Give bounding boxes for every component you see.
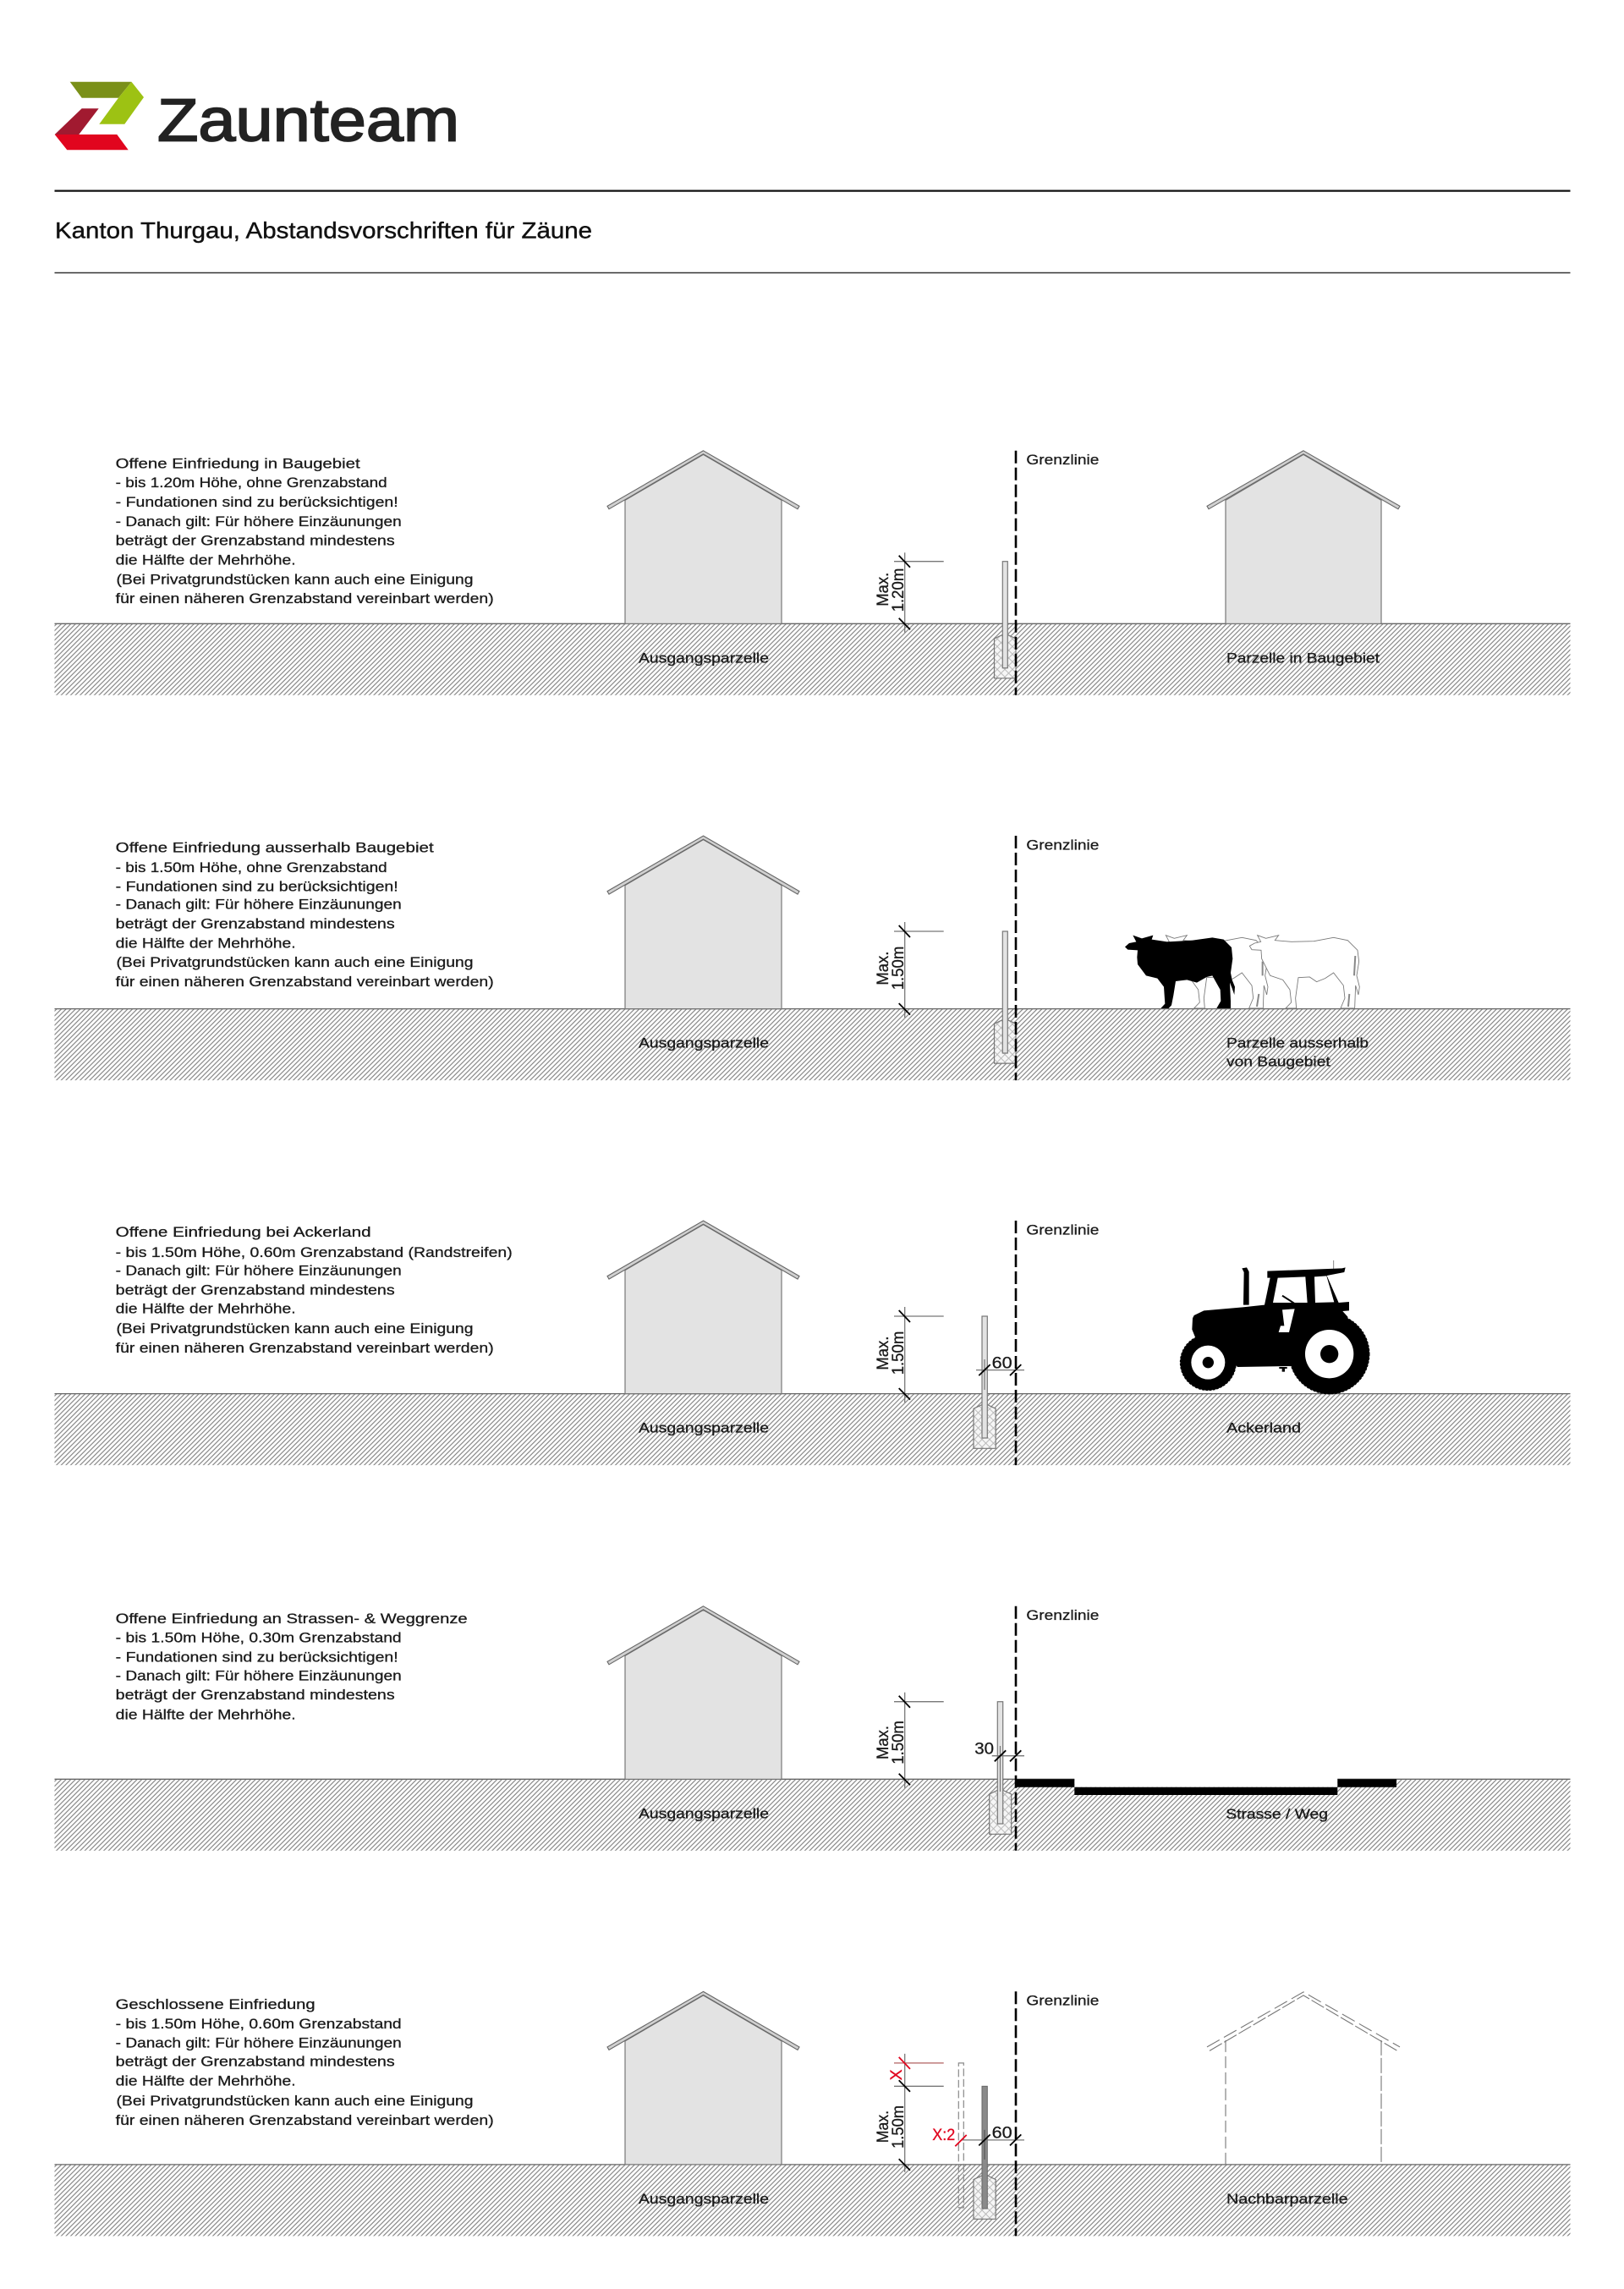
text block: rules <box>116 840 494 990</box>
text block: rules: - bis 1.50m Höhe, 0.60m Grenzabstand (Randstreifen) <box>116 1244 513 1260</box>
text block: rules: die Hälfte der Mehrhöhe. <box>116 935 296 951</box>
height dimension <box>875 1693 944 1788</box>
label: Strasse / Weg: Strasse / Weg <box>1226 1806 1328 1822</box>
label: Ausgangsparzelle: Ausgangsparzelle <box>639 1805 769 1821</box>
panel: Offene Einfriedung bei Ackerland <box>54 1221 1570 1465</box>
panel: Geschlossene Einfriedung <box>54 1991 1570 2236</box>
text block: rules: - Danach gilt: Für höhere Einzäunungen <box>116 897 402 913</box>
label: Grenzlinie: Grenzlinie <box>1026 1993 1099 2009</box>
icon: cows <box>1125 936 1359 1008</box>
header rule <box>54 190 1570 192</box>
ground hatch <box>54 2165 1570 2236</box>
height dimension with red X offset: X <box>888 2069 906 2080</box>
logo <box>55 82 459 155</box>
fence post and foundation <box>995 562 1016 678</box>
distance dimension: 30: 30 <box>974 1740 994 1758</box>
house: neighbour <box>1207 451 1400 623</box>
text block: rules: beträgt der Grenzabstand mindestens <box>116 915 395 931</box>
text block: rules: (Bei Privatgrundstücken kann auch eine Einigung <box>117 1320 474 1337</box>
title: Kanton Thurgau, Abstandsvorschriften für Zäune <box>55 218 592 244</box>
distance dimension: 60: 60 <box>992 1354 1012 1372</box>
panel: Offene Einfriedung ausserhalb Baugebiet <box>54 836 1570 1080</box>
boundary line <box>1015 1991 1017 2236</box>
text block: rules <box>116 1224 513 1356</box>
text block: rules: für einen näheren Grenzabstand vereinbart werden) <box>116 1340 494 1356</box>
text block: rules <box>116 1996 494 2128</box>
text block: rules: beträgt der Grenzabstand mindestens <box>116 533 395 549</box>
text block: rules: - Fundationen sind zu berücksichtigen! <box>116 1650 398 1666</box>
distance dimension: 30 <box>974 1740 1024 1761</box>
height dimension <box>875 1307 944 1402</box>
text block: rules: beträgt der Grenzabstand mindestens <box>116 1282 395 1298</box>
text block: rules: (Bei Privatgrundstücken kann auch eine Einigung <box>117 2093 474 2109</box>
height dimension: Max. <box>875 1726 892 1759</box>
label: Grenzlinie: Grenzlinie <box>1026 837 1099 853</box>
panel: Offene Einfriedung an Strassen- & Weggrenze <box>54 1606 1570 1851</box>
text block: rules: Offene Einfriedung bei Ackerland <box>116 1224 371 1240</box>
label: Ausgangsparzelle: Ausgangsparzelle <box>639 1420 769 1436</box>
fence post and foundation <box>995 931 1016 1063</box>
boundary line <box>1015 1221 1017 1465</box>
label: Grenzlinie: Grenzlinie <box>1026 1221 1099 1238</box>
ground hatch <box>54 1009 1570 1080</box>
text block: rules: - bis 1.50m Höhe, 0.30m Grenzabstand <box>116 1630 402 1646</box>
distance dimension: 60 and X:2 <box>932 2124 1024 2146</box>
text block: rules: Offene Einfriedung in Baugebiet <box>116 455 360 471</box>
text block: rules: die Hälfte der Mehrhöhe. <box>116 1706 296 1722</box>
road surface <box>1016 1778 1396 1795</box>
distance dimension: 60 and X:2: X:2 <box>932 2127 955 2144</box>
boundary line <box>1015 836 1017 1080</box>
height dimension: Max. <box>875 1337 892 1370</box>
label: Nachbarparzelle: Nachbarparzelle <box>1226 2191 1348 2207</box>
text block: rules: - bis 1.50m Höhe, ohne Grenzabstand <box>116 859 387 876</box>
text block: rules: die Hälfte der Mehrhöhe. <box>116 1301 296 1317</box>
text block: rules: - Danach gilt: Für höhere Einzäunungen <box>116 513 402 530</box>
icon: tractor <box>1180 1260 1369 1394</box>
boundary line <box>1015 451 1017 695</box>
height dimension: 1.50m <box>890 1721 908 1765</box>
label: Grenzlinie: Grenzlinie <box>1026 1607 1099 1623</box>
text block: rules: beträgt der Grenzabstand mindestens <box>116 1687 395 1703</box>
label: Ausgangsparzelle: Ausgangsparzelle <box>639 650 769 666</box>
fence post and foundation <box>974 1316 996 1448</box>
ground line <box>54 1008 1570 1010</box>
ground line <box>54 623 1570 624</box>
height dimension <box>875 922 944 1018</box>
text block: rules: für einen näheren Grenzabstand vereinbart werden) <box>116 590 494 607</box>
house: Ausgangsparzelle <box>607 1606 799 1779</box>
house: Ausgangsparzelle <box>607 451 799 623</box>
text block: rules <box>116 455 494 607</box>
text block: rules: - bis 1.50m Höhe, 0.60m Grenzabstand <box>116 2016 402 2032</box>
text block: rules: - Danach gilt: Für höhere Einzäunungen <box>116 1667 402 1683</box>
text block: rules: (Bei Privatgrundstücken kann auch eine Einigung <box>117 954 474 970</box>
text block: rules: Offene Einfriedung ausserhalb Baugebiet <box>116 840 434 856</box>
text block: rules: Offene Einfriedung an Strassen- & Weggrenze <box>116 1611 468 1627</box>
text block: rules: die Hälfte der Mehrhöhe. <box>116 552 296 568</box>
label: Ausgangsparzelle: Ausgangsparzelle <box>639 1035 769 1051</box>
icon: Z logo mark <box>55 82 144 150</box>
logo wordmark: Zaunteam <box>157 88 459 155</box>
house: Ausgangsparzelle <box>607 836 799 1009</box>
label: Ackerland: Ackerland <box>1226 1420 1301 1436</box>
ground hatch <box>54 1779 1570 1851</box>
text block: rules: Geschlossene Einfriedung <box>116 1996 315 2012</box>
panel: Offene Einfriedung in Baugebiet <box>54 451 1570 695</box>
text block: rules <box>116 1611 468 1722</box>
ground line <box>54 2164 1570 2165</box>
house: Ausgangsparzelle <box>607 1221 799 1394</box>
label: Parzelle ausserhalb von Baugebiet: von Baugebiet <box>1226 1054 1330 1070</box>
distance dimension: 60 <box>976 1354 1024 1375</box>
label: Parzelle ausserhalb von Baugebiet <box>1226 1035 1369 1070</box>
text block: rules: - Fundationen sind zu berücksichtigen! <box>116 494 398 510</box>
distance dimension: 60 and X:2: 60 <box>992 2124 1012 2142</box>
house: Ausgangsparzelle <box>607 1991 799 2165</box>
ground hatch <box>54 623 1570 695</box>
ground line <box>54 1393 1570 1395</box>
boundary line <box>1015 1606 1017 1851</box>
text block: rules: beträgt der Grenzabstand mindestens <box>116 2053 395 2069</box>
height dimension: Max. <box>875 573 892 607</box>
dashed higher fence position <box>958 2063 963 2208</box>
label: Ausgangsparzelle: Ausgangsparzelle <box>639 2191 769 2207</box>
height dimension: 1.50m <box>890 1331 908 1375</box>
label: Parzelle in Baugebiet: Parzelle in Baugebiet <box>1226 650 1380 666</box>
text block: rules: - bis 1.20m Höhe, ohne Grenzabstand <box>116 475 387 491</box>
text block: rules: für einen näheren Grenzabstand vereinbart werden) <box>116 974 494 990</box>
text block: rules: - Fundationen sind zu berücksichtigen! <box>116 879 398 895</box>
fence post and foundation <box>974 2086 996 2219</box>
ground line <box>54 1778 1570 1780</box>
height dimension with red X offset: 1.50m <box>890 2105 908 2149</box>
text block: rules: (Bei Privatgrundstücken kann auch eine Einigung <box>117 571 474 587</box>
text block: rules: die Hälfte der Mehrhöhe. <box>116 2072 296 2089</box>
text block: rules: für einen näheren Grenzabstand vereinbart werden) <box>116 2112 494 2128</box>
fence post and foundation <box>990 1702 1012 1834</box>
title rule <box>54 272 1570 274</box>
height dimension: 1.50m <box>890 947 908 990</box>
house: dashed neighbour outline <box>1207 1992 1400 2165</box>
height dimension: 1.20m <box>890 568 908 612</box>
label: Parzelle ausserhalb von Baugebiet: Parzelle ausserhalb <box>1226 1035 1369 1051</box>
height dimension <box>875 552 944 633</box>
text block: rules: - Danach gilt: Für höhere Einzäunungen <box>116 2035 402 2051</box>
label: Grenzlinie: Grenzlinie <box>1026 452 1099 468</box>
ground hatch <box>54 1394 1570 1465</box>
height dimension: Max. <box>875 952 892 985</box>
height dimension with red X offset: Max. <box>875 2111 892 2143</box>
height dimension with red X offset <box>875 2054 944 2172</box>
text block: rules: - Danach gilt: Für höhere Einzäunungen <box>116 1263 402 1279</box>
